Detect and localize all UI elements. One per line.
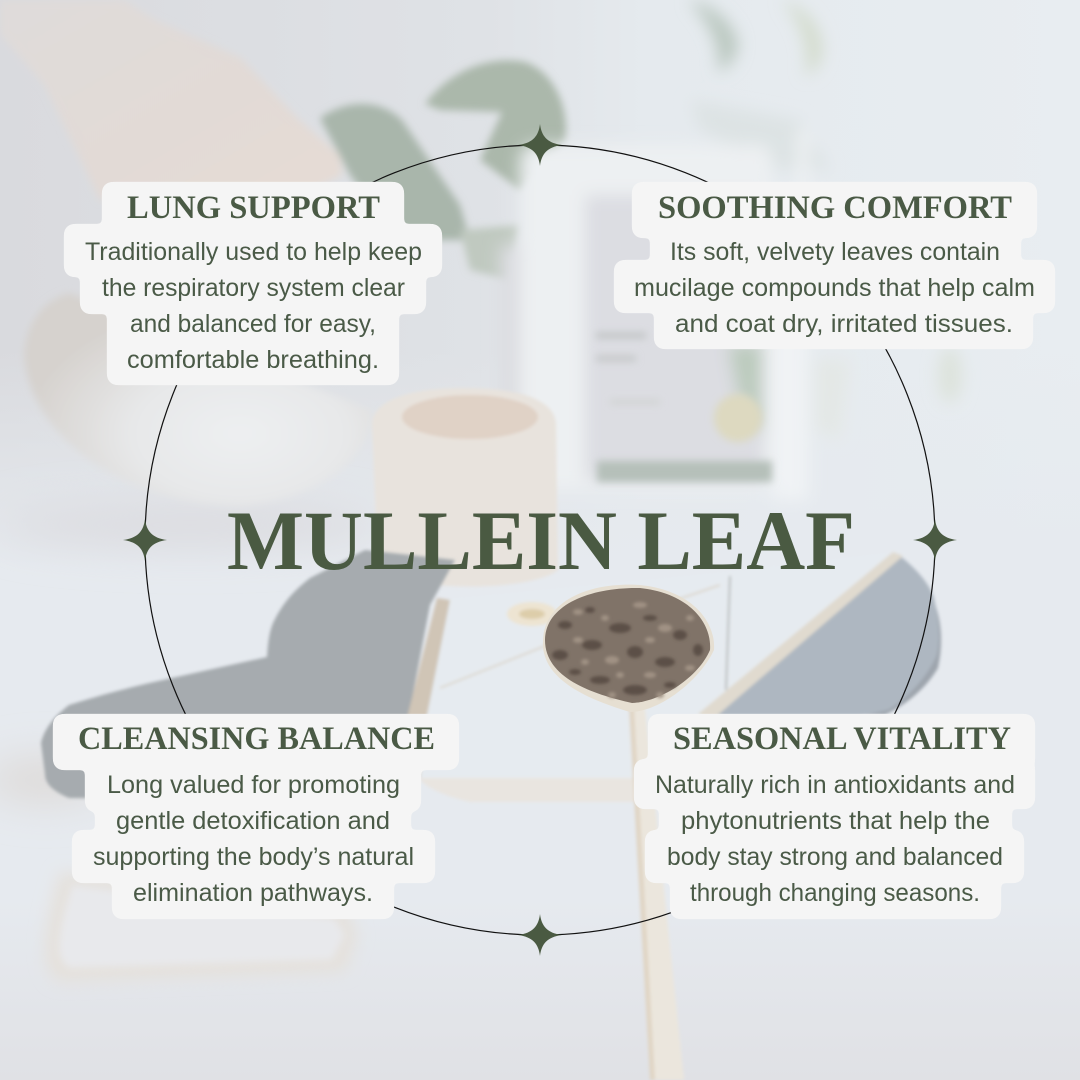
text: soothing comfort description: Its soft, velvety leaves contain xyxy=(670,238,1000,266)
text: lung support description: and balanced for easy, xyxy=(130,310,376,338)
icon: star top xyxy=(518,124,562,166)
text: cleansing balance description xyxy=(93,771,414,907)
text: cleansing balance description: gentle detoxification and xyxy=(116,807,390,835)
heading: cleansing balance: CLEANSING BALANCE xyxy=(78,721,435,757)
text: soothing comfort description: and coat dry, irritated tissues. xyxy=(675,310,1013,338)
panel: cleansing balance xyxy=(53,714,459,919)
text: seasonal vitality description: Naturally rich in antioxidants and xyxy=(655,771,1015,799)
panel: seasonal vitality xyxy=(634,714,1035,919)
circle outline xyxy=(145,145,935,935)
text: soothing comfort description xyxy=(634,238,1035,338)
panel: soothing comfort xyxy=(614,182,1055,349)
title: MULLEIN LEAF xyxy=(227,494,855,588)
text: seasonal vitality description: through changing seasons. xyxy=(690,879,980,907)
text: seasonal vitality description: phytonutrients that help the xyxy=(681,807,990,835)
text: lung support description: Traditionally used to help keep xyxy=(85,238,422,266)
text: seasonal vitality description xyxy=(655,771,1015,907)
heading: seasonal vitality: SEASONAL VITALITY xyxy=(673,721,1011,757)
text: cleansing balance description: elimination pathways. xyxy=(133,879,373,907)
text: soothing comfort description: mucilage compounds that help calm xyxy=(634,274,1035,302)
text: cleansing balance description: Long valued for promoting xyxy=(107,771,400,799)
heading: soothing comfort: SOOTHING COMFORT xyxy=(658,190,1012,226)
text: lung support description: the respiratory system clear xyxy=(102,274,405,302)
text: lung support description xyxy=(85,238,422,374)
icon: star right xyxy=(913,519,957,561)
icon: star bottom xyxy=(518,914,562,956)
icon: star left xyxy=(123,519,167,561)
text: cleansing balance description: supporting the body’s natural xyxy=(93,843,414,871)
text: seasonal vitality description: body stay strong and balanced xyxy=(667,843,1003,871)
panel: lung support xyxy=(64,182,442,385)
text: lung support description: comfortable breathing. xyxy=(127,346,379,374)
heading: lung support: LUNG SUPPORT xyxy=(127,190,380,226)
